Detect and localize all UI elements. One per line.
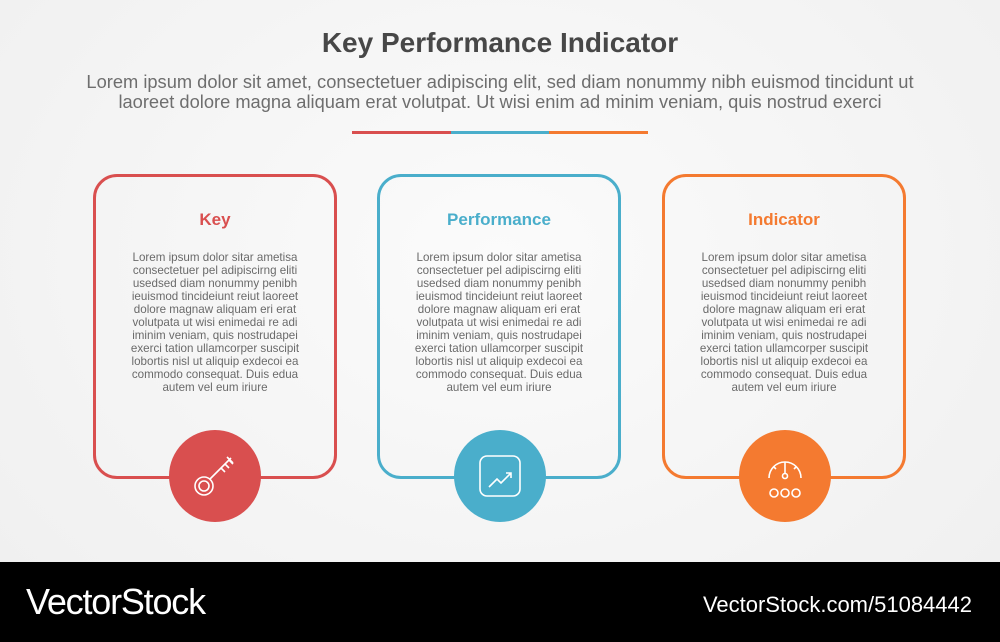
panel: key	[93, 174, 337, 479]
icon: key	[169, 430, 261, 522]
footer url: VectorStock.com/51084442	[703, 592, 972, 617]
text: indicator: Lorem ipsum dolor sitar ametisa consectetuer pel adipiscirng eliti usedsed diam nonummy penibh ieuismod tincideiunt reiut laoreet dolore magnaw aliquam eri erat volutpata ut wisi enimedai re adi iminim veniam, quis nostrudapei exerci tation ullamcorper suscipit lobortis nisl ut aliquip exdecoi ea commodo consequat. Duis edua autem vel eum iriure	[700, 251, 868, 394]
heading: performance: Performance	[447, 210, 551, 229]
panel: indicator	[662, 174, 906, 479]
icon: gauge	[739, 430, 831, 522]
icon: chart	[454, 430, 546, 522]
title: Key Performance Indicator	[322, 27, 678, 58]
subtitle: Lorem ipsum dolor sit amet, consectetuer adipiscing elit, sed diam nonummy nibh euismod tincidunt ut laoreet dolore magna aliquam erat volutpat. Ut wisi enim ad minim veniam, quis nostrud exerci	[86, 71, 914, 112]
text: key: Lorem ipsum dolor sitar ametisa consectetuer pel adipiscirng eliti usedsed diam nonummy penibh ieuismod tincideiunt reiut laoreet dolore magnaw aliquam eri erat volutpata ut wisi enimedai re adi iminim veniam, quis nostrudapei exerci tation ullamcorper suscipit lobortis nisl ut aliquip exdecoi ea commodo consequat. Duis edua autem vel eum iriure	[131, 251, 299, 394]
heading: key: Key	[199, 210, 231, 229]
footer bar	[0, 562, 1000, 642]
heading: indicator: Indicator	[748, 210, 820, 229]
panel: performance	[377, 174, 621, 479]
footer logo: VectorStock	[26, 581, 205, 622]
divider tricolor	[352, 131, 648, 134]
text: performance: Lorem ipsum dolor sitar ametisa consectetuer pel adipiscirng eliti usedsed diam nonummy penibh ieuismod tincideiunt reiut laoreet dolore magnaw aliquam eri erat volutpata ut wisi enimedai re adi iminim veniam, quis nostrudapei exerci tation ullamcorper suscipit lobortis nisl ut aliquip exdecoi ea commodo consequat. Duis edua autem vel eum iriure	[415, 251, 583, 394]
